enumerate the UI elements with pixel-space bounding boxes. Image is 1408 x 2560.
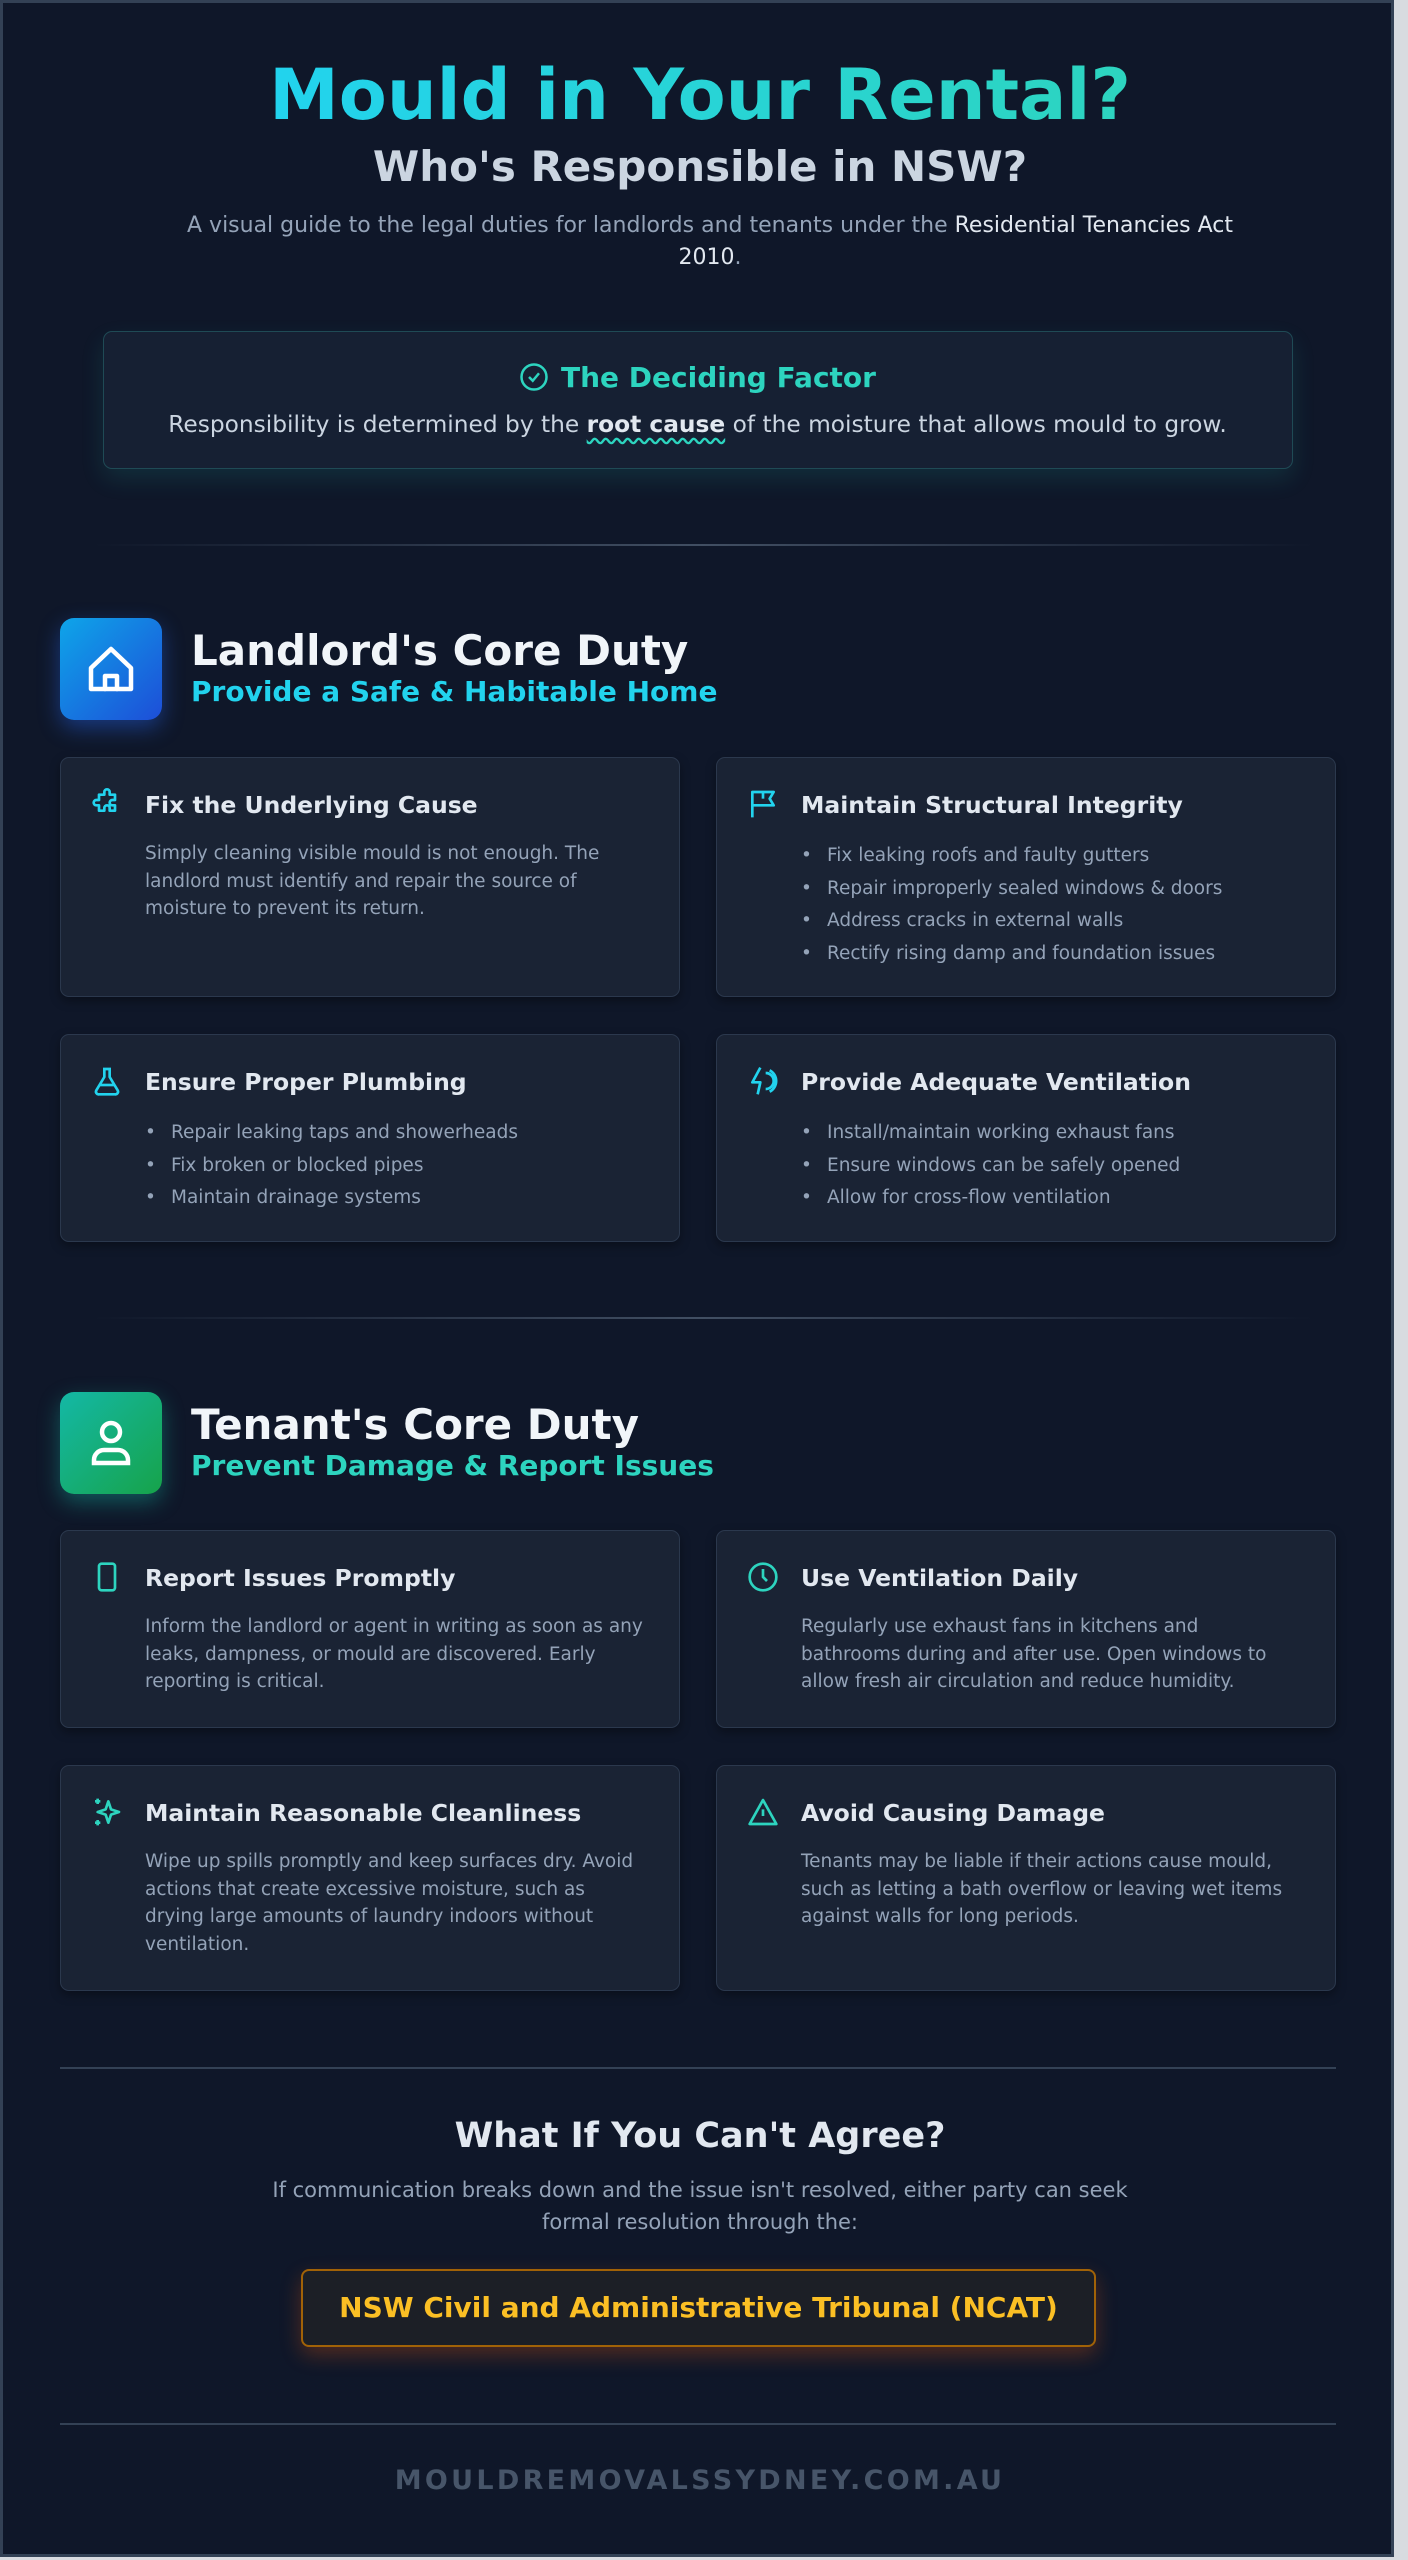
icon: warning [748, 1798, 778, 1826]
section header: tenant [49, 1389, 714, 1513]
card: fix cause [60, 757, 680, 997]
icon: house [60, 618, 162, 720]
card: ventilation daily [716, 1530, 1336, 1728]
callout text: Responsibility is determined by the root cause of the moisture that allows mould to grow. [168, 411, 1227, 438]
card: ventilation daily: Use Ventilation Daily [801, 1564, 1078, 1592]
callout: deciding factor [103, 331, 1293, 469]
heading: what if: What If You Can't Agree? [455, 2116, 945, 2156]
card: report: Inform the landlord or agent in writing as soon as any leaks, dampness, or mould are discovered. Early reporting is critical. [145, 1616, 643, 1692]
card: ventilation daily: bathrooms during and after use. Open windows to allow fresh air circulation and reduce humidity. [801, 1644, 1266, 1692]
card: ventilation [716, 1034, 1336, 1242]
icon: airflow [750, 1067, 778, 1095]
card: plumbing: Maintain drainage systems [171, 1187, 421, 1208]
title: Mould in Your Rental? [269, 54, 1131, 136]
card: ventilation: Allow for cross-flow ventilation [827, 1187, 1111, 1208]
icon: puzzle [92, 788, 116, 812]
card: structural: Repair improperly sealed windows & doors [827, 878, 1222, 899]
card: cleanliness: Maintain Reasonable Cleanliness [145, 1799, 581, 1827]
callout: NCAT [301, 2269, 1096, 2347]
subheading: Provide a Safe & Habitable Home [191, 675, 717, 708]
card: cleanliness: drying large amounts of laundry indoors without ventilation. [145, 1906, 593, 1954]
icon: flag [751, 790, 776, 818]
intro text: A visual guide to the legal duties for landlords and tenants under the Residential Tenancies Act 2010. [187, 213, 1233, 270]
section header: landlord [46, 612, 717, 742]
icon: flask [94, 1068, 120, 1096]
card: plumbing: Ensure Proper Plumbing [145, 1068, 467, 1096]
heading: Tenant's Core Duty [191, 1400, 639, 1449]
card: plumbing: Fix broken or blocked pipes [171, 1155, 423, 1176]
icon: sparkles [95, 1798, 120, 1826]
card: structural: Maintain Structural Integrity [801, 791, 1183, 819]
card: structural [716, 757, 1336, 997]
card: report [60, 1530, 680, 1728]
icon: clock [748, 1562, 778, 1592]
card: cleanliness [60, 1765, 680, 1991]
text: resolution: If communication breaks down and the issue isn't resolved, either party can seek formal resolution through the: [272, 2178, 1128, 2234]
card: ventilation: Ensure windows can be safely opened [827, 1155, 1180, 1176]
card: plumbing [60, 1034, 680, 1242]
card: avoid damage: Avoid Causing Damage [801, 1799, 1105, 1827]
footer: MOULDREMOVALSSYDNEY.COM.AU [395, 2465, 1005, 2496]
card: ventilation daily: Regularly use exhaust fans in kitchens and [801, 1616, 1198, 1637]
callout: NCAT: NSW Civil and Administrative Tribunal (NCAT) [339, 2291, 1058, 2324]
card: plumbing: Repair leaking taps and showerheads [171, 1122, 518, 1143]
heading: Landlord's Core Duty [191, 626, 688, 675]
callout heading: The Deciding Factor [561, 361, 876, 394]
card: ventilation: Install/maintain working exhaust fans [827, 1122, 1175, 1143]
subtitle: Who's Responsible in NSW? [373, 142, 1027, 191]
card: avoid damage [716, 1765, 1336, 1991]
card: fix cause: Simply cleaning visible mould is not enough. The landlord must identify and repair the source of moisture to prevent its return. [145, 843, 599, 919]
card: structural: Fix leaking roofs and faulty gutters [827, 845, 1149, 866]
card: ventilation: Provide Adequate Ventilation [801, 1068, 1191, 1096]
card: avoid damage: Tenants may be liable if their actions cause mould, such as letting a bath overflow or leaving wet items against walls for long periods. [801, 1851, 1282, 1927]
icon: person [60, 1392, 162, 1494]
card: structural: Rectify rising damp and foundation issues [827, 943, 1215, 964]
card: structural: Address cracks in external walls [827, 910, 1123, 931]
subheading: Prevent Damage & Report Issues [191, 1449, 714, 1482]
card: cleanliness: Wipe up spills promptly and keep surfaces dry. Avoid actions that create excessive moisture, such as [145, 1851, 633, 1900]
icon: phone [98, 1562, 116, 1592]
card: report: Report Issues Promptly [145, 1564, 455, 1592]
card: fix cause: Fix the Underlying Cause [145, 791, 478, 819]
